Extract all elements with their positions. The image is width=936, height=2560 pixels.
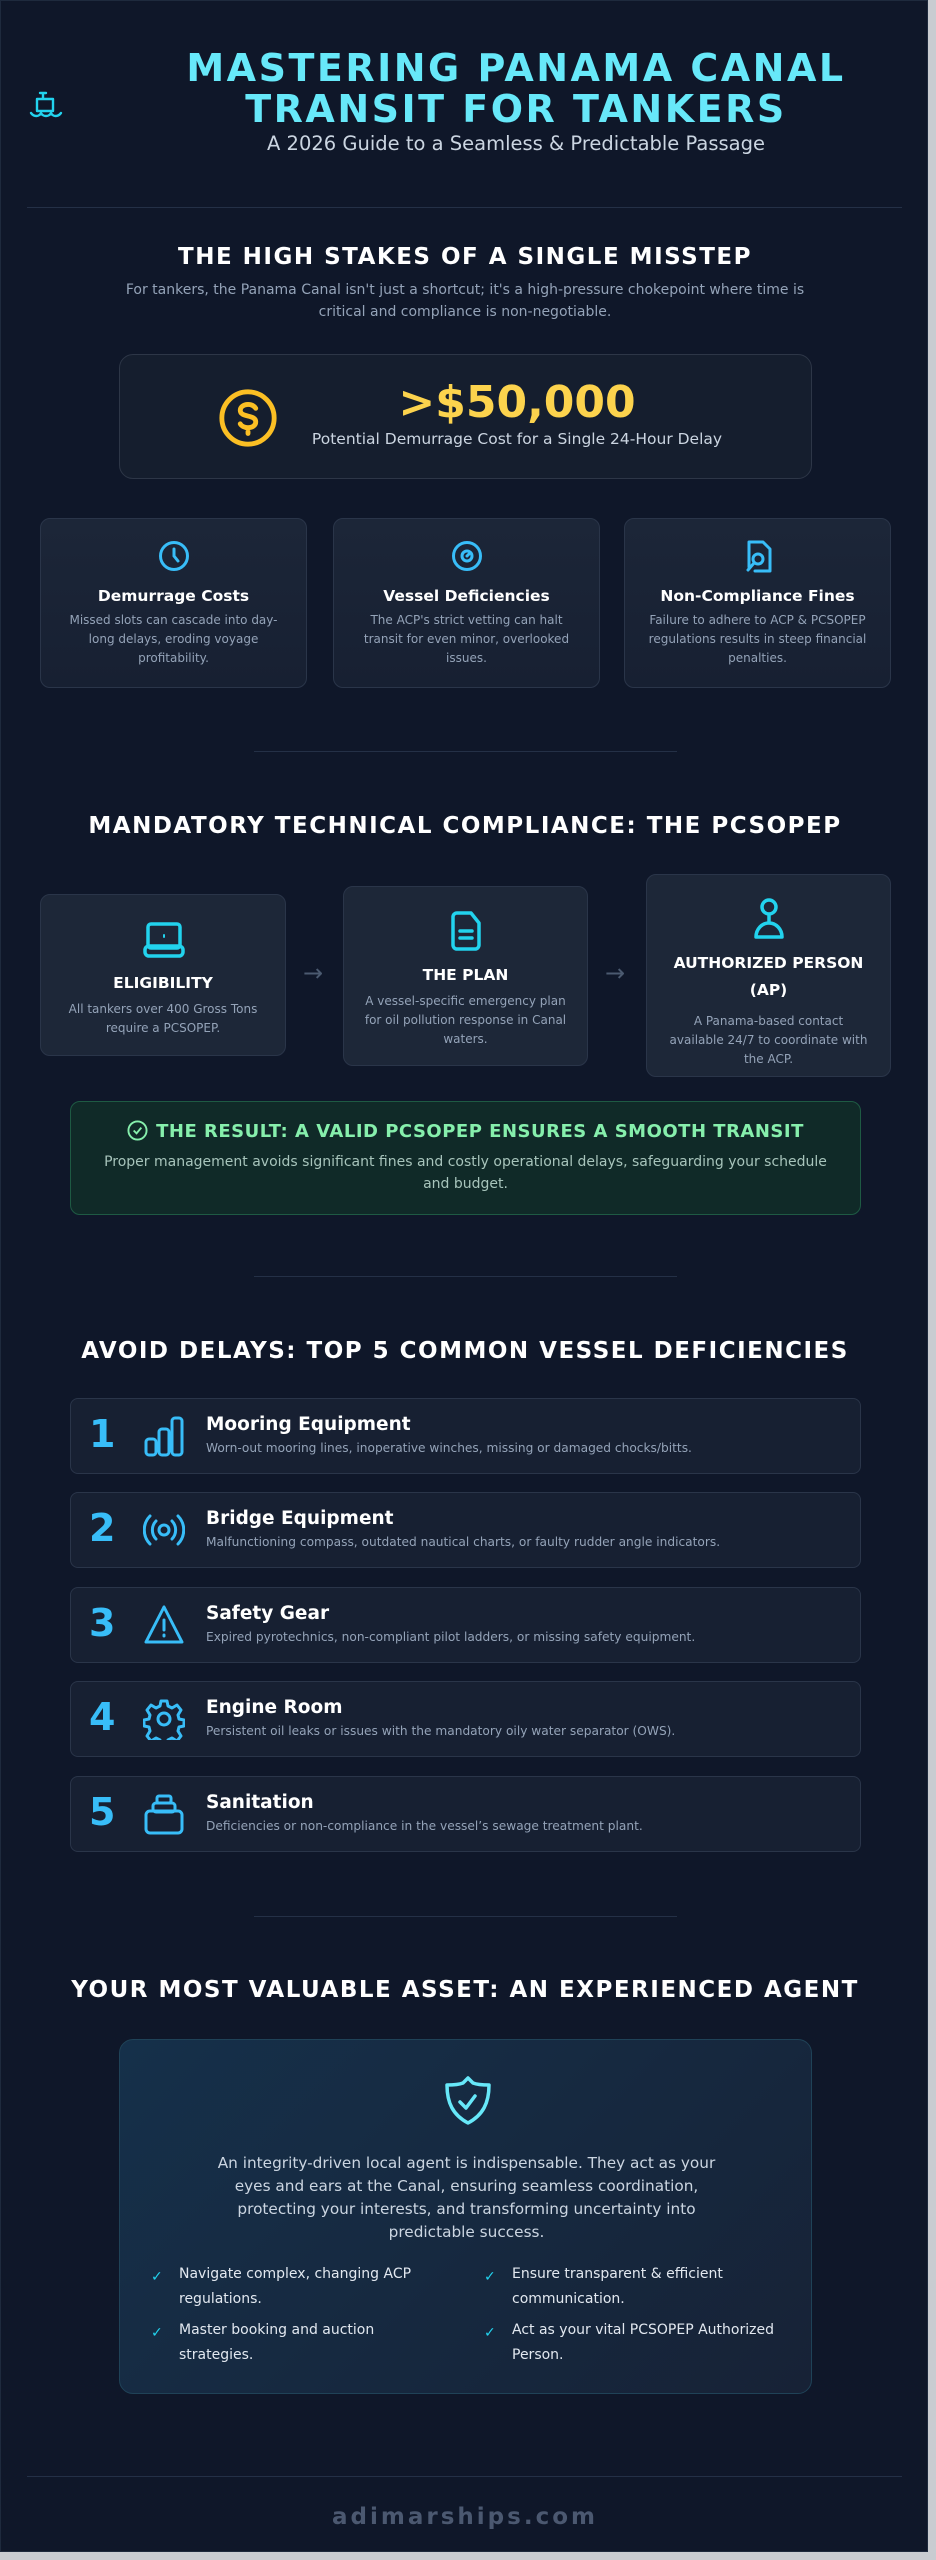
card: demurrage: Missed slots can cascade into day-long delays, eroding voyage profitability.	[69, 613, 278, 665]
card: demurrage: Demurrage Costs	[98, 587, 249, 605]
agent text: An integrity-driven local agent is indispensable. They act as your eyes and ears at the Canal, ensuring seamless coordination, protecting your interests, and transforming uncertainty into predictable success.	[218, 2154, 715, 2241]
icon: coin	[219, 389, 277, 447]
icon: clock	[159, 541, 189, 571]
heading: PCSOPEP: MANDATORY TECHNICAL COMPLIANCE: THE PCSOPEP	[88, 813, 842, 839]
icon: gauge	[452, 541, 482, 571]
card: vessel deficiencies	[333, 518, 600, 688]
stat caption: Potential Demurrage Cost for a Single 24-Hour Delay	[312, 430, 722, 448]
heading: deficiencies: AVOID DELAYS: TOP 5 COMMON VESSEL DEFICIENCIES	[81, 1338, 849, 1364]
bullets: ✓	[151, 2269, 163, 2285]
bullets	[151, 2266, 774, 2363]
row 5: sanitation	[70, 1776, 861, 1852]
card: fines	[624, 518, 891, 688]
card: fines: Non-Compliance Fines	[660, 587, 855, 605]
intro text: For tankers, the Panama Canal isn't just a shortcut; it's a high-pressure chokepoint where time is critical and compliance is non-negotiable.	[126, 282, 804, 320]
row 4: engine: 4	[89, 1695, 115, 1739]
bullets: Navigate complex, changing ACP regulations.	[179, 2266, 411, 2307]
icon: ship	[30, 92, 62, 118]
row 3: safety: Safety Gear	[206, 1603, 329, 1624]
result callout	[70, 1101, 861, 1215]
card: vessel deficiencies: The ACP's strict vetting can halt transit for even minor, overlooked issues.	[364, 613, 569, 665]
title: TRANSIT FOR TANKERS	[245, 87, 787, 131]
step: eligibility	[40, 894, 286, 1056]
row 2: bridge	[70, 1492, 861, 1568]
step: eligibility: ELIGIBILITY	[113, 974, 213, 992]
subtitle: A 2026 Guide to a Seamless & Predictable Passage	[267, 132, 765, 155]
row 5: sanitation: Deficiencies or non-compliance in the vessel’s sewage treatment plant.	[206, 1819, 643, 1833]
title: MASTERING PANAMA CANAL	[186, 46, 846, 90]
step: authorized person: A Panama-based contact available 24/7 to coordinate with the ACP.	[670, 1014, 867, 1066]
card: vessel deficiencies: Vessel Deficiencies	[383, 587, 550, 605]
bullets: ✓	[151, 2325, 163, 2341]
row 2: bridge: 2	[89, 1506, 115, 1550]
arrow: →	[303, 959, 323, 987]
result heading: THE RESULT: A VALID PCSOPEP ENSURES A SMOOTH TRANSIT	[156, 1121, 804, 1142]
row 5: sanitation: Sanitation	[206, 1792, 314, 1813]
arrow: →	[605, 959, 625, 987]
bullets: Master booking and auction strategies.	[179, 2322, 374, 2363]
row 4: engine: Engine Room	[206, 1697, 342, 1718]
bullets: Ensure transparent & efficient communication.	[512, 2266, 723, 2307]
step: authorized person	[646, 874, 891, 1077]
heading: high stakes: THE HIGH STAKES OF A SINGLE MISSTEP	[178, 244, 752, 270]
row 2: bridge: Malfunctioning compass, outdated nautical charts, or faulty rudder angle indicators.	[206, 1535, 720, 1549]
icon: shield	[445, 2076, 491, 2125]
row 5: sanitation: 5	[89, 1790, 115, 1834]
row 1: mooring: Worn-out mooring lines, inoperative winches, missing or damaged chocks/bitts.	[206, 1441, 692, 1455]
icon: document	[451, 911, 481, 951]
agent panel	[119, 2039, 812, 2394]
footer: adimarships.com	[332, 2504, 598, 2530]
title	[186, 46, 846, 131]
row 4: engine: Persistent oil leaks or issues with the mandatory oily water separator (OWS).	[206, 1724, 675, 1738]
card: demurrage	[40, 518, 307, 688]
stat number: >$50,000	[398, 377, 636, 428]
row 3: safety: 3	[89, 1601, 115, 1645]
step: authorized person: (AP)	[750, 981, 787, 999]
row 1: mooring: Mooring Equipment	[206, 1414, 411, 1435]
icon: laptop	[143, 922, 185, 958]
card: fines: Failure to adhere to ACP & PCSOPEP regulations results in steep financial penalties.	[649, 613, 866, 665]
step: the plan	[343, 886, 588, 1066]
row 1: mooring	[70, 1398, 861, 1474]
row 2: bridge: Bridge Equipment	[206, 1508, 394, 1529]
row 4: engine	[70, 1681, 861, 1757]
icon: person	[754, 898, 784, 939]
step: the plan: A vessel-specific emergency plan for oil pollution response in Canal waters.	[365, 994, 566, 1046]
row 3: safety	[70, 1587, 861, 1663]
bullets: ✓	[484, 2325, 496, 2341]
row 3: safety: Expired pyrotechnics, non-compliant pilot ladders, or missing safety equipment.	[206, 1630, 695, 1644]
row 1: mooring: 1	[89, 1412, 115, 1456]
heading: agent: YOUR MOST VALUABLE ASSET: AN EXPERIENCED AGENT	[71, 1977, 859, 2003]
result text: Proper management avoids significant fines and costly operational delays, safeguarding your schedule and budget.	[104, 1154, 827, 1192]
stat box	[119, 354, 812, 479]
step: the plan: THE PLAN	[423, 966, 508, 984]
step: eligibility: All tankers over 400 Gross Tons require a PCSOPEP.	[69, 1002, 257, 1035]
bullets: Act as your vital PCSOPEP Authorized Person.	[512, 2322, 774, 2363]
bullets: ✓	[484, 2269, 496, 2285]
step: authorized person: AUTHORIZED PERSON	[674, 954, 863, 972]
icon: file search	[746, 540, 772, 572]
